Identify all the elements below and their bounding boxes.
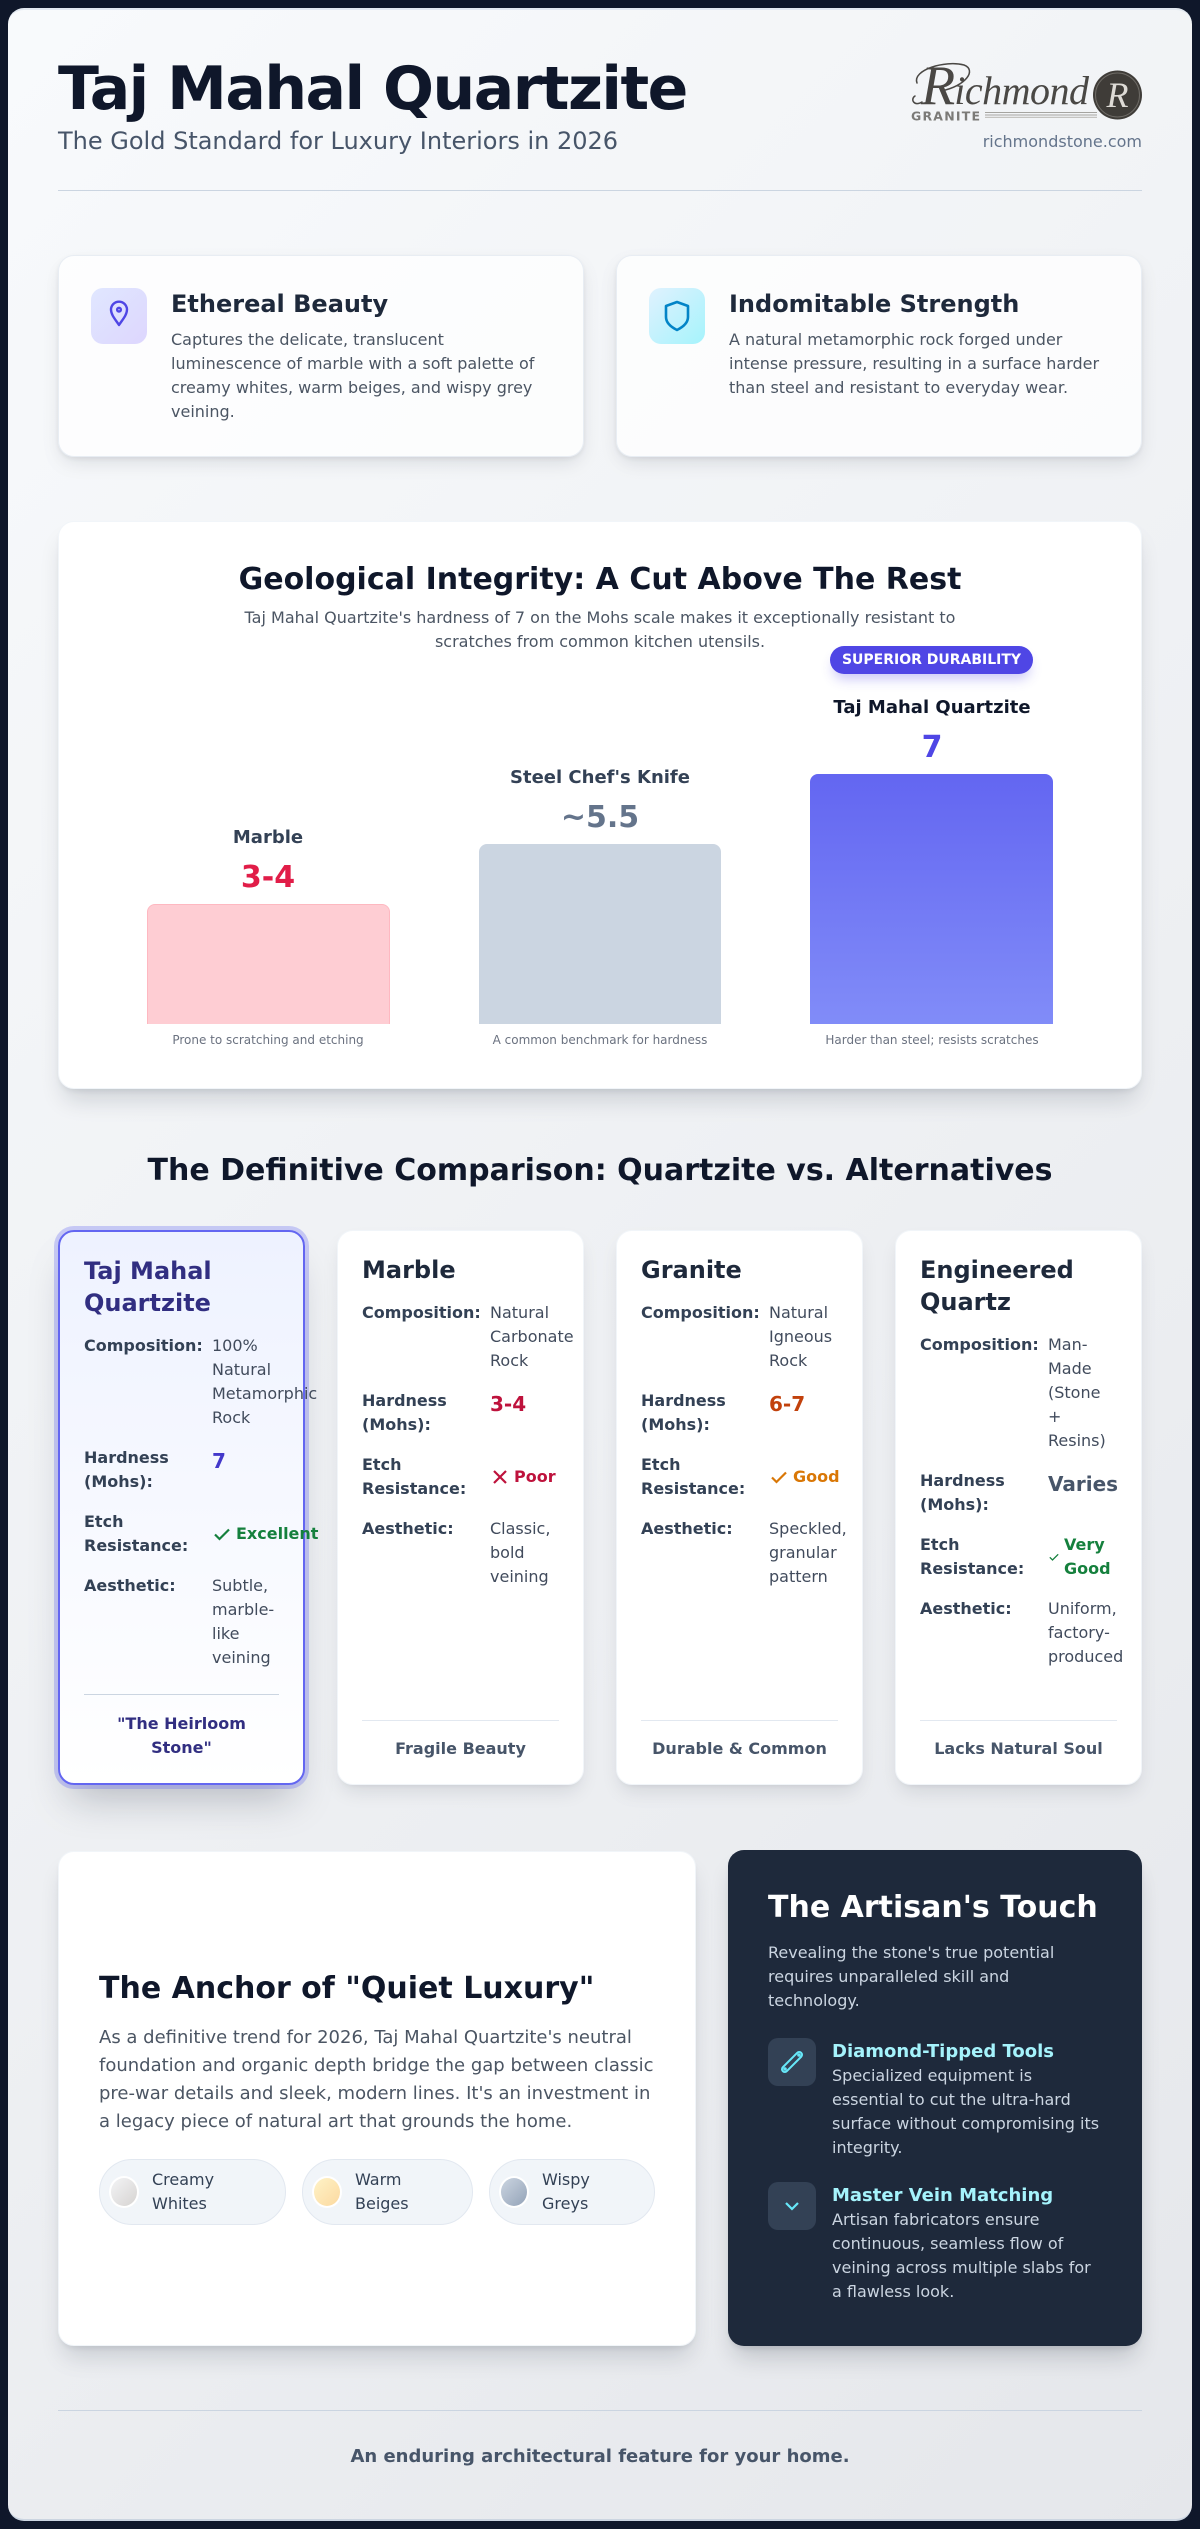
label: steel: Steel Chef's Knife bbox=[510, 767, 690, 788]
label: Warm bbox=[355, 2170, 401, 2189]
pill: warm beiges bbox=[302, 2159, 473, 2225]
artisan text: requires unparalleled skill and bbox=[768, 1967, 1009, 1986]
hardness row: Hardness (Mohs): bbox=[362, 1391, 447, 1434]
header divider bbox=[58, 190, 1142, 191]
value: steel: ~5.5 bbox=[561, 800, 639, 835]
etch row: Excellent bbox=[236, 1524, 318, 1543]
label bbox=[355, 2170, 409, 2213]
composition row bbox=[84, 1336, 317, 1427]
panel: indomitable strength bbox=[616, 255, 1142, 457]
aesthetic row: Aesthetic: bbox=[920, 1599, 1012, 1618]
panel: artisan's touch bbox=[728, 1850, 1142, 2346]
aesthetic row: Classic, bold veining bbox=[490, 1519, 550, 1586]
composition row: Natural Carbonate Rock bbox=[490, 1303, 574, 1370]
hardness row bbox=[641, 1391, 805, 1434]
composition row: Composition: bbox=[641, 1303, 760, 1322]
artisan heading: The Artisan's Touch bbox=[768, 1890, 1098, 1925]
label: Creamy bbox=[152, 2170, 214, 2189]
etch row: Etch Resistance: bbox=[920, 1535, 1024, 1578]
card verdict: "The Heirloom Stone" bbox=[117, 1714, 246, 1757]
card heading: Marble bbox=[362, 1256, 456, 1284]
artisan text: technology. bbox=[768, 1991, 860, 2010]
value: quartzite: 7 bbox=[922, 730, 942, 765]
aesthetic row bbox=[641, 1519, 847, 1586]
logo: Richmond Granite bbox=[911, 55, 1142, 124]
icon: chevron bbox=[768, 2182, 816, 2230]
etch row: Etch Resistance: bbox=[84, 1512, 188, 1555]
card: engineered quartz bbox=[895, 1230, 1142, 1785]
chart description: Taj Mahal Quartzite's hardness of 7 on the Mohs scale makes it exceptionally resistant to scratches from common kitchen utensils. bbox=[245, 608, 955, 651]
etch row: Etch Resistance: bbox=[362, 1455, 466, 1498]
logo: Richmond Granite: Richmond bbox=[920, 55, 1090, 117]
panel: geological integrity bbox=[58, 521, 1142, 1089]
etch row: Good bbox=[793, 1467, 840, 1486]
section heading: The Definitive Comparison: Quartzite vs. Alternatives bbox=[148, 1153, 1052, 1188]
hardness row bbox=[920, 1471, 1118, 1514]
icon: diamond tool bbox=[768, 2038, 816, 2086]
quiet luxury heading: The Anchor of "Quiet Luxury" bbox=[99, 1971, 594, 2006]
hardness row: Hardness (Mohs): bbox=[641, 1391, 726, 1434]
footer divider bbox=[58, 2410, 1142, 2411]
chart heading: Geological Integrity: A Cut Above The Rest bbox=[239, 562, 961, 597]
card verdict bbox=[84, 1694, 279, 1760]
value: marble: 3-4 bbox=[241, 860, 295, 895]
aesthetic row bbox=[84, 1576, 274, 1667]
hardness row: 6-7 bbox=[769, 1392, 805, 1416]
card verdict bbox=[362, 1720, 559, 1761]
label: marble: Marble bbox=[233, 827, 303, 848]
heading: Ethereal Beauty bbox=[171, 290, 388, 318]
hardness row: Varies bbox=[1048, 1472, 1118, 1496]
bar chart bbox=[147, 646, 1053, 1047]
aesthetic row: Speckled, granular pattern bbox=[769, 1519, 847, 1586]
feature text: tools: essential to cut the ultra-hard bbox=[832, 2090, 1071, 2109]
feature title: vein matching: Master Vein Matching bbox=[832, 2185, 1053, 2206]
card verdict bbox=[920, 1720, 1117, 1761]
pill: wispy greys bbox=[489, 2159, 655, 2225]
etch row: Etch Resistance: bbox=[641, 1455, 745, 1498]
bar: steel bbox=[479, 844, 721, 1024]
bar: quartzite bbox=[810, 774, 1053, 1024]
card verdict bbox=[641, 1720, 838, 1761]
composition row: Natural Igneous Rock bbox=[769, 1303, 832, 1370]
aesthetic row bbox=[362, 1519, 550, 1586]
card heading: Granite bbox=[641, 1256, 742, 1284]
composition row: Composition: bbox=[362, 1303, 481, 1322]
composition row bbox=[362, 1303, 574, 1370]
quiet luxury text: As a definitive trend for 2026, Taj Mahal Quartzite's neutral foundation and organic depth bridge the gap between classic pre-war details and sleek, modern lines. It's an investment in a legacy piece of natural art that grounds the home. bbox=[99, 2027, 654, 2132]
subtitle: The Gold Standard for Luxury Interiors in 2026 bbox=[58, 127, 618, 155]
composition row: Man-Made (Stone + Resins) bbox=[1048, 1335, 1106, 1450]
title: Taj Mahal Quartzite bbox=[58, 54, 687, 124]
composition row bbox=[641, 1303, 832, 1370]
feature text: vein matching bbox=[832, 2210, 1091, 2301]
heading: Indomitable Strength bbox=[729, 290, 1019, 318]
feature text: tools: Specialized equipment is bbox=[832, 2066, 1032, 2085]
panel: ethereal beauty bbox=[58, 255, 584, 457]
label: Whites bbox=[152, 2194, 207, 2213]
etch row bbox=[84, 1512, 318, 1555]
hardness row: Hardness (Mohs): bbox=[84, 1448, 169, 1491]
pill: creamy whites bbox=[99, 2159, 286, 2225]
label bbox=[152, 2170, 214, 2213]
hardness row: 7 bbox=[212, 1449, 226, 1473]
description: A natural metamorphic rock forged under intense pressure, resulting in a surface harder than steel and resistant to everyday wear. bbox=[729, 330, 1099, 397]
swatch bbox=[312, 2176, 342, 2208]
description: Captures the delicate, translucent luminescence of marble with a soft palette of creamy whites, warm beiges, and wispy grey veining. bbox=[171, 330, 534, 421]
feature text: vein matching: Artisan fabricators ensure bbox=[832, 2210, 1039, 2229]
bar: marble bbox=[147, 904, 390, 1024]
composition row: Composition: bbox=[920, 1335, 1039, 1354]
card verdict: Durable & Common bbox=[652, 1739, 827, 1758]
label bbox=[542, 2170, 590, 2213]
hardness row: 3-4 bbox=[490, 1392, 526, 1416]
icon: shield bbox=[649, 288, 705, 344]
caption: quartzite: Harder than steel; resists scratches bbox=[825, 1033, 1039, 1047]
etch row: Very Good bbox=[1064, 1535, 1111, 1578]
swatch bbox=[499, 2176, 529, 2208]
card verdict: Lacks Natural Soul bbox=[934, 1739, 1103, 1758]
feature text: vein matching: veining across multiple slabs for bbox=[832, 2258, 1091, 2277]
feature text: vein matching: continuous, seamless flow of bbox=[832, 2234, 1063, 2253]
feature text: tools: integrity. bbox=[832, 2138, 902, 2157]
label: Greys bbox=[542, 2194, 588, 2213]
aesthetic row bbox=[920, 1599, 1123, 1666]
feature title: tools: Diamond-Tipped Tools bbox=[832, 2041, 1054, 2062]
label: quartzite: Taj Mahal Quartzite bbox=[833, 697, 1031, 718]
label: Wispy bbox=[542, 2170, 590, 2189]
etch row bbox=[641, 1455, 840, 1498]
logo: Richmond Granite: R bbox=[1106, 75, 1128, 115]
composition row: 100% Natural Metamorphic Rock bbox=[212, 1336, 317, 1427]
card verdict: Fragile Beauty bbox=[395, 1739, 526, 1758]
hardness row: Hardness (Mohs): bbox=[920, 1471, 1005, 1514]
etch row bbox=[920, 1535, 1111, 1578]
logo: Richmond Granite: GRANITE bbox=[911, 108, 980, 124]
icon: pin bbox=[91, 288, 147, 344]
website: richmondstone.com bbox=[983, 132, 1142, 151]
badge bbox=[830, 646, 1033, 674]
hardness row bbox=[84, 1448, 226, 1491]
badge: SUPERIOR DURABILITY bbox=[842, 652, 1021, 668]
hardness row bbox=[362, 1391, 526, 1434]
feature text: vein matching: a flawless look. bbox=[832, 2282, 954, 2301]
artisan text: Revealing the stone's true potential bbox=[768, 1943, 1054, 1962]
card: granite bbox=[616, 1230, 863, 1785]
composition row: Composition: bbox=[84, 1336, 203, 1355]
label: Beiges bbox=[355, 2194, 409, 2213]
caption: steel: A common benchmark for hardness bbox=[493, 1033, 707, 1047]
aesthetic row: Aesthetic: bbox=[84, 1576, 176, 1595]
aesthetic row: Subtle, marble-like veining bbox=[212, 1576, 274, 1667]
panel: quiet luxury bbox=[58, 1851, 696, 2346]
card heading: Engineered Quartz bbox=[920, 1256, 1074, 1316]
aesthetic row: Uniform, factory-produced bbox=[1048, 1599, 1123, 1666]
artisan text bbox=[768, 1943, 1054, 2010]
feature text: tools bbox=[832, 2066, 1099, 2157]
caption: marble: Prone to scratching and etching bbox=[172, 1033, 364, 1047]
etch row: Poor bbox=[514, 1467, 556, 1486]
card: taj mahal quartzite bbox=[58, 1230, 305, 1785]
card heading: Taj Mahal Quartzite bbox=[84, 1257, 212, 1317]
feature text: tools: surface without compromising its bbox=[832, 2114, 1099, 2133]
aesthetic row: Aesthetic: bbox=[641, 1519, 733, 1538]
composition row bbox=[920, 1335, 1106, 1450]
footer text: An enduring architectural feature for your home. bbox=[350, 2446, 850, 2467]
card: marble bbox=[337, 1230, 584, 1785]
etch row bbox=[362, 1455, 556, 1498]
swatch bbox=[109, 2176, 139, 2208]
aesthetic row: Aesthetic: bbox=[362, 1519, 454, 1538]
